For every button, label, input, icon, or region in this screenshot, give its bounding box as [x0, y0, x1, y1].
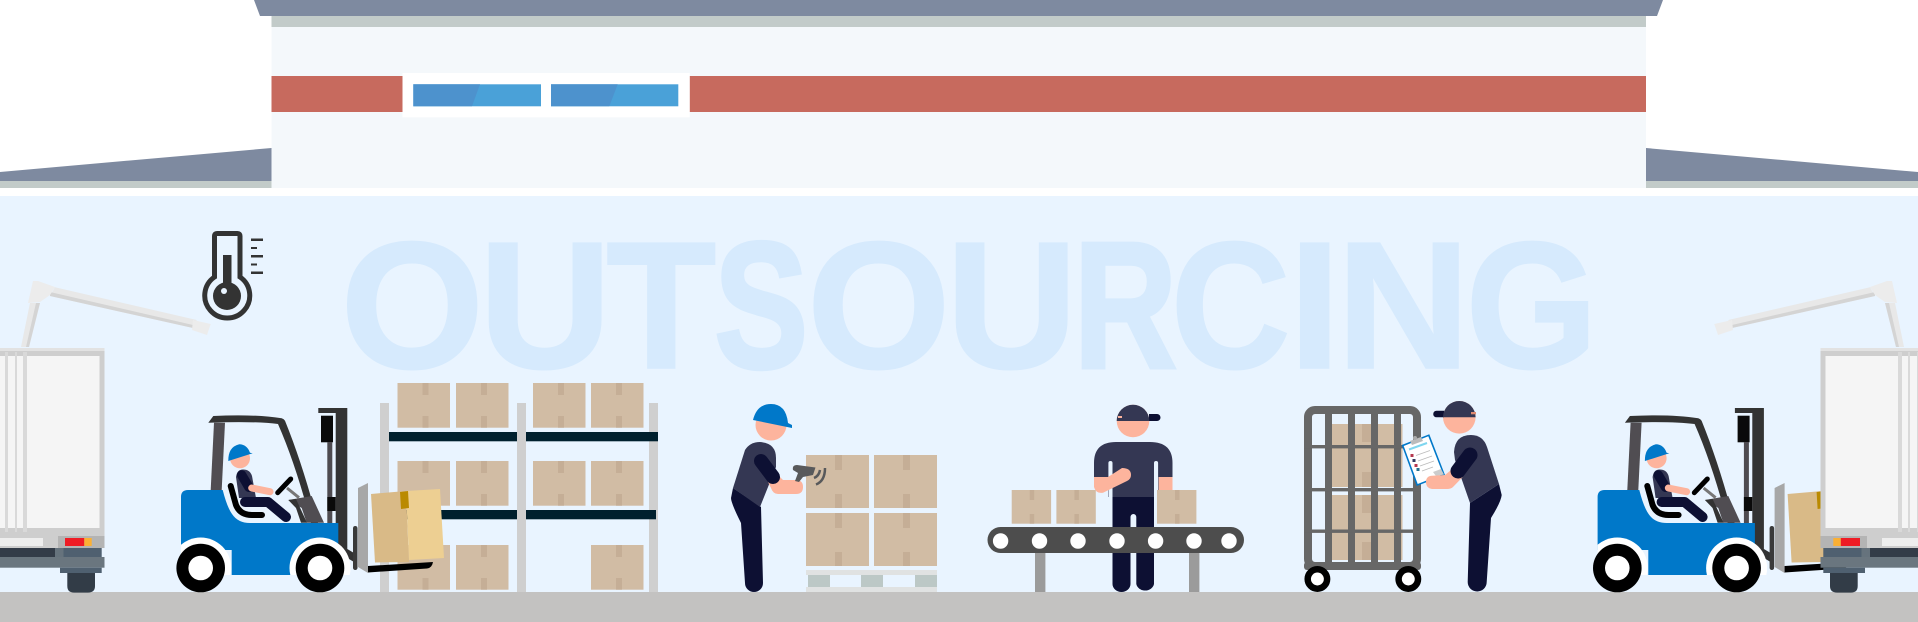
warehouse interior panel — [0, 196, 1918, 592]
truck and dock arm left — [0, 281, 211, 593]
floor — [0, 592, 1918, 622]
heading: OUTSOURCING watermark: S — [714, 206, 808, 407]
conveyor legs — [1035, 553, 1199, 592]
barcode scanner — [793, 465, 825, 484]
heading: OUTSOURCING watermark: G — [1466, 206, 1598, 407]
heading: OUTSOURCING watermark: U — [946, 205, 1077, 406]
stacked pallet — [806, 455, 937, 592]
legs — [1468, 484, 1502, 592]
pallet boxes — [806, 455, 937, 566]
shirt — [1094, 442, 1172, 497]
conveyor belt — [988, 490, 1244, 592]
conveyor worker — [1094, 405, 1172, 592]
left side roof — [0, 148, 272, 188]
window left — [413, 84, 541, 106]
hard hat — [753, 404, 792, 428]
right side roof — [1646, 148, 1918, 188]
red stripe right — [690, 76, 1646, 112]
forklift body — [181, 490, 338, 575]
truck and dock arm right — [1714, 281, 1918, 593]
right arm — [1159, 477, 1172, 493]
heading: OUTSOURCING watermark — [341, 204, 1598, 407]
main roof — [254, 0, 1663, 16]
heading: OUTSOURCING watermark: N — [1337, 205, 1470, 406]
window frame — [402, 73, 690, 117]
carton on forks — [371, 489, 444, 562]
fork carriage — [353, 483, 433, 573]
cage boxes — [1332, 424, 1402, 560]
head — [1443, 401, 1476, 434]
rear wheel — [176, 544, 225, 592]
rack boxes — [398, 383, 644, 590]
rack shelves — [389, 432, 658, 519]
storage rack with boxes — [380, 383, 658, 592]
roof fascia band — [272, 16, 1646, 27]
worker with scanner — [731, 404, 825, 592]
head — [756, 410, 786, 440]
window right — [551, 84, 678, 106]
driver — [228, 444, 299, 517]
heading: OUTSOURCING watermark: O — [341, 204, 484, 406]
conveyor boxes — [1012, 490, 1196, 524]
bumper — [0, 548, 104, 573]
head — [1117, 405, 1149, 437]
forearm — [768, 475, 803, 494]
belt — [988, 527, 1244, 553]
roll cage trolley — [1304, 406, 1421, 589]
forklift right — [1587, 408, 1861, 598]
heading: OUTSOURCING watermark: T — [606, 205, 716, 407]
cap — [1433, 401, 1476, 417]
worker with clipboard — [1402, 401, 1502, 592]
wheel arches — [170, 538, 350, 598]
front wheel — [296, 544, 344, 592]
sleeve — [761, 461, 773, 477]
forklift left — [170, 408, 444, 598]
icon: thermometer — [205, 234, 263, 318]
warehouse building — [0, 0, 1918, 188]
pallet — [806, 570, 937, 592]
red stripe left — [272, 76, 402, 112]
dock arm — [21, 281, 211, 347]
cab frame — [208, 415, 324, 523]
sleeve — [1458, 455, 1470, 471]
rollers — [993, 533, 1237, 549]
torso — [1454, 435, 1499, 503]
heading: OUTSOURCING watermark: O — [807, 204, 950, 406]
heading: OUTSOURCING watermark: C — [1171, 205, 1290, 406]
truck box — [0, 348, 104, 536]
mast — [318, 408, 354, 562]
rack uprights — [380, 403, 658, 592]
cage frame — [1304, 406, 1421, 570]
tail lights — [0, 536, 104, 548]
forearm — [1426, 470, 1463, 489]
legs — [1112, 497, 1154, 592]
heading: OUTSOURCING watermark: R — [1074, 206, 1177, 406]
forearm — [1094, 468, 1131, 493]
truck tire — [67, 573, 95, 593]
building wall — [272, 27, 1646, 188]
legs — [731, 488, 763, 592]
cage wheels — [1308, 569, 1418, 589]
heading: OUTSOURCING watermark: I — [1289, 204, 1341, 406]
arm gaps — [1108, 461, 1158, 497]
cap — [1117, 405, 1160, 421]
clipboard — [1402, 434, 1445, 486]
heading: OUTSOURCING watermark: U — [479, 205, 611, 406]
torso — [733, 442, 776, 507]
